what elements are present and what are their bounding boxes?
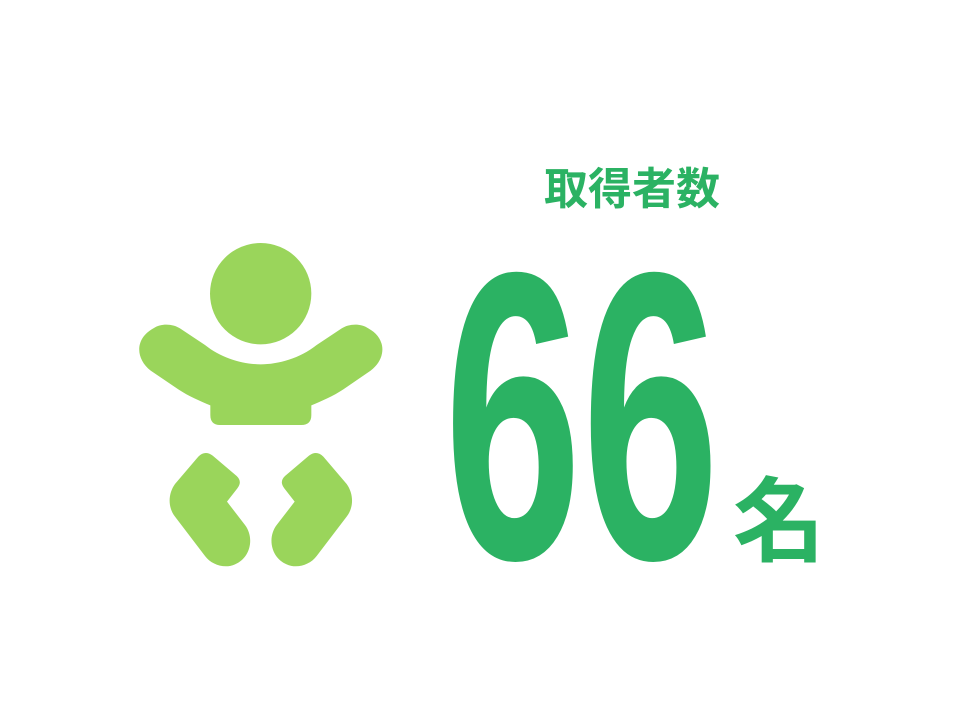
icon part: head: [210, 243, 311, 344]
icon: baby: [139, 243, 382, 566]
icon part: left foot: [170, 453, 250, 566]
unit: people counter: 名: [733, 472, 825, 574]
icon part: arms and torso: [139, 325, 382, 425]
big number: 66: 66: [444, 186, 719, 645]
icon part: right foot: [271, 453, 352, 566]
heading: recipients count label: 取得者数: [544, 165, 720, 214]
